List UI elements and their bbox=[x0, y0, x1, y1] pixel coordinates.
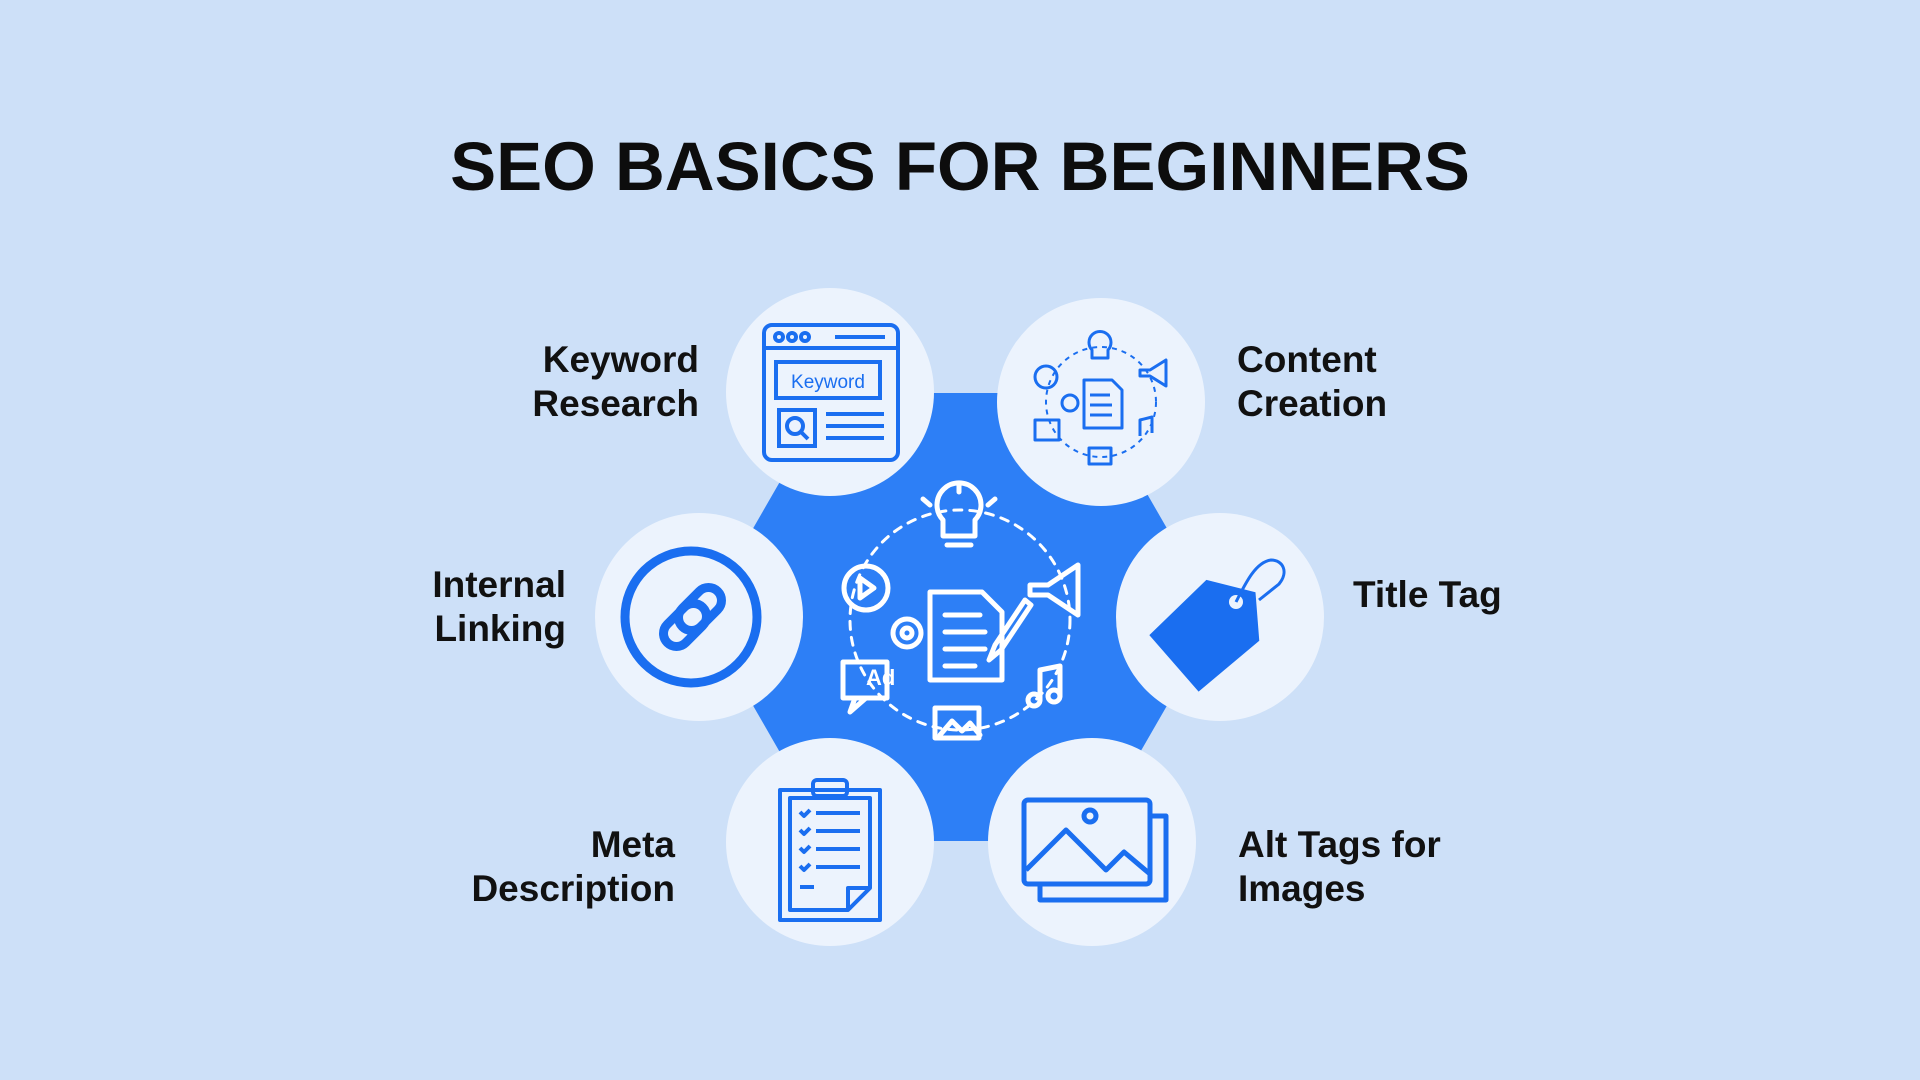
label: meta description: Meta bbox=[591, 824, 675, 865]
label: alt tags for images: Alt Tags for bbox=[1238, 824, 1441, 865]
label: keyword research: Research bbox=[532, 383, 699, 424]
title: SEO BASICS FOR BEGINNERS bbox=[450, 128, 1470, 205]
circle: alt tags bbox=[988, 738, 1196, 946]
hexagon bbox=[702, 393, 1218, 841]
label: alt tags for images: Images bbox=[1238, 868, 1366, 909]
label: content creation: Content bbox=[1237, 339, 1377, 380]
circle: keyword research: Keyword bbox=[791, 372, 865, 393]
label: internal linking: Linking bbox=[434, 608, 566, 649]
label: content creation: Creation bbox=[1237, 383, 1387, 424]
icon: center content hub bbox=[843, 483, 1078, 738]
label: title tag: Title Tag bbox=[1353, 574, 1502, 615]
label: keyword research: Keyword bbox=[543, 339, 699, 380]
circle: meta description bbox=[726, 738, 934, 946]
circle: internal linking bbox=[595, 513, 803, 721]
circle: content creation bbox=[997, 298, 1205, 506]
label: meta description: Description bbox=[471, 868, 675, 909]
circle: title tag bbox=[1116, 513, 1324, 721]
label: internal linking: Internal bbox=[432, 564, 566, 605]
text: Ad bbox=[866, 665, 895, 690]
circle: keyword research bbox=[726, 288, 934, 496]
